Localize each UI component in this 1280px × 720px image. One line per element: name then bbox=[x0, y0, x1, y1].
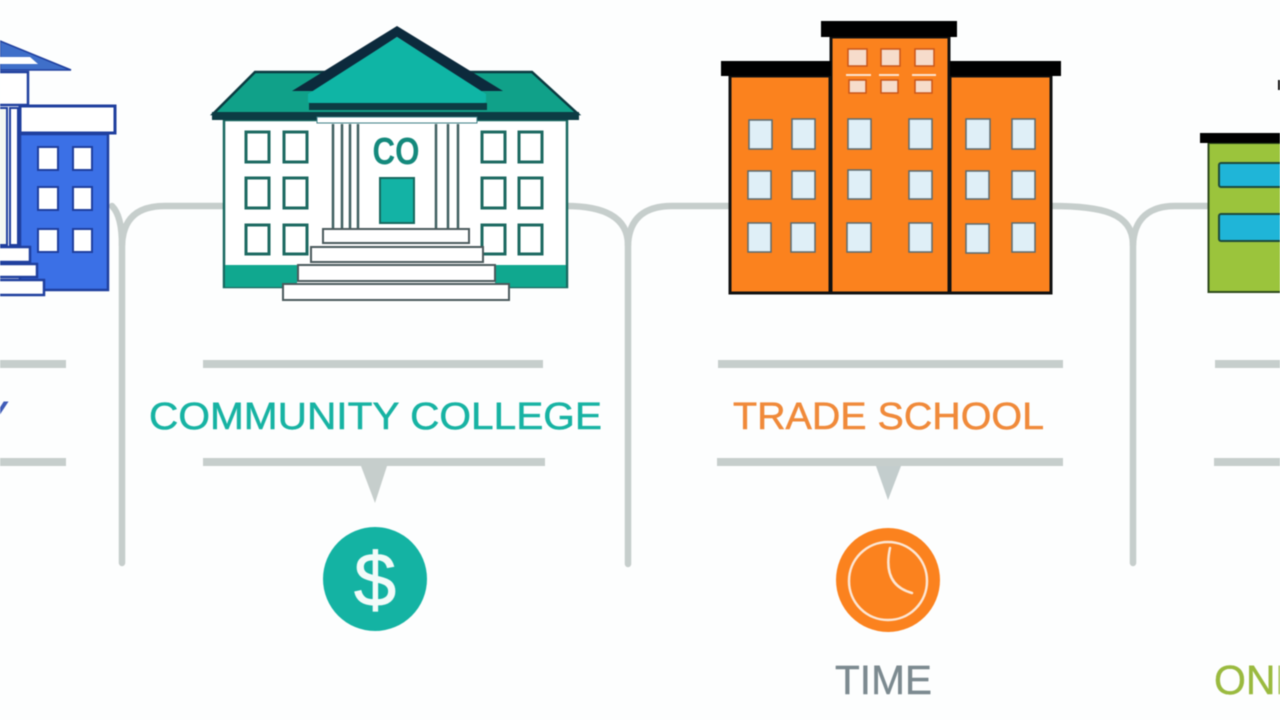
emblem: CO bbox=[372, 131, 420, 173]
side windows bbox=[246, 132, 542, 254]
tower sign windows bbox=[848, 49, 934, 93]
icon: dollar bbox=[323, 527, 427, 631]
roof bbox=[0, 41, 71, 70]
steps bbox=[283, 229, 509, 300]
walls bbox=[224, 120, 567, 287]
black caps bbox=[721, 21, 1061, 76]
building: online (green) bbox=[1200, 80, 1280, 292]
body bbox=[1208, 143, 1280, 292]
white frieze bbox=[317, 117, 477, 123]
pointer: trade school bbox=[876, 466, 901, 500]
icon: dollar: $ bbox=[354, 538, 396, 623]
label: time: TIME bbox=[835, 657, 932, 703]
base bands bbox=[225, 265, 297, 287]
wing windows bbox=[38, 147, 92, 252]
tower sign rules bbox=[846, 74, 936, 76]
wing body bbox=[20, 134, 108, 290]
label: community college: COMMUNITY COLLEGE bbox=[149, 396, 602, 438]
columns bbox=[0, 108, 7, 245]
cap bbox=[1200, 133, 1280, 143]
screens bbox=[1219, 163, 1280, 187]
building: university (blue) bbox=[0, 41, 115, 295]
top fragment bbox=[1278, 80, 1280, 90]
icon: clock bbox=[836, 528, 940, 632]
columns bbox=[333, 124, 458, 228]
entablature bbox=[0, 72, 28, 105]
dark pediment outline bbox=[292, 26, 503, 91]
label rules bbox=[0, 360, 1280, 466]
side roofs bbox=[213, 72, 578, 114]
wings and tower bbox=[730, 37, 1051, 293]
door bbox=[380, 178, 414, 223]
label: trade school: TRADE SCHOOL bbox=[733, 396, 1044, 438]
building: trade school (orange) bbox=[721, 21, 1061, 293]
windows bbox=[748, 119, 1035, 253]
building: community college (teal) bbox=[212, 26, 579, 300]
teal pediment bbox=[308, 37, 486, 104]
steps bbox=[0, 247, 44, 295]
roof band bbox=[212, 112, 579, 120]
pointer: community college bbox=[361, 466, 387, 503]
wing cap bbox=[20, 106, 115, 133]
connector lines between institutions bbox=[112, 206, 1210, 564]
